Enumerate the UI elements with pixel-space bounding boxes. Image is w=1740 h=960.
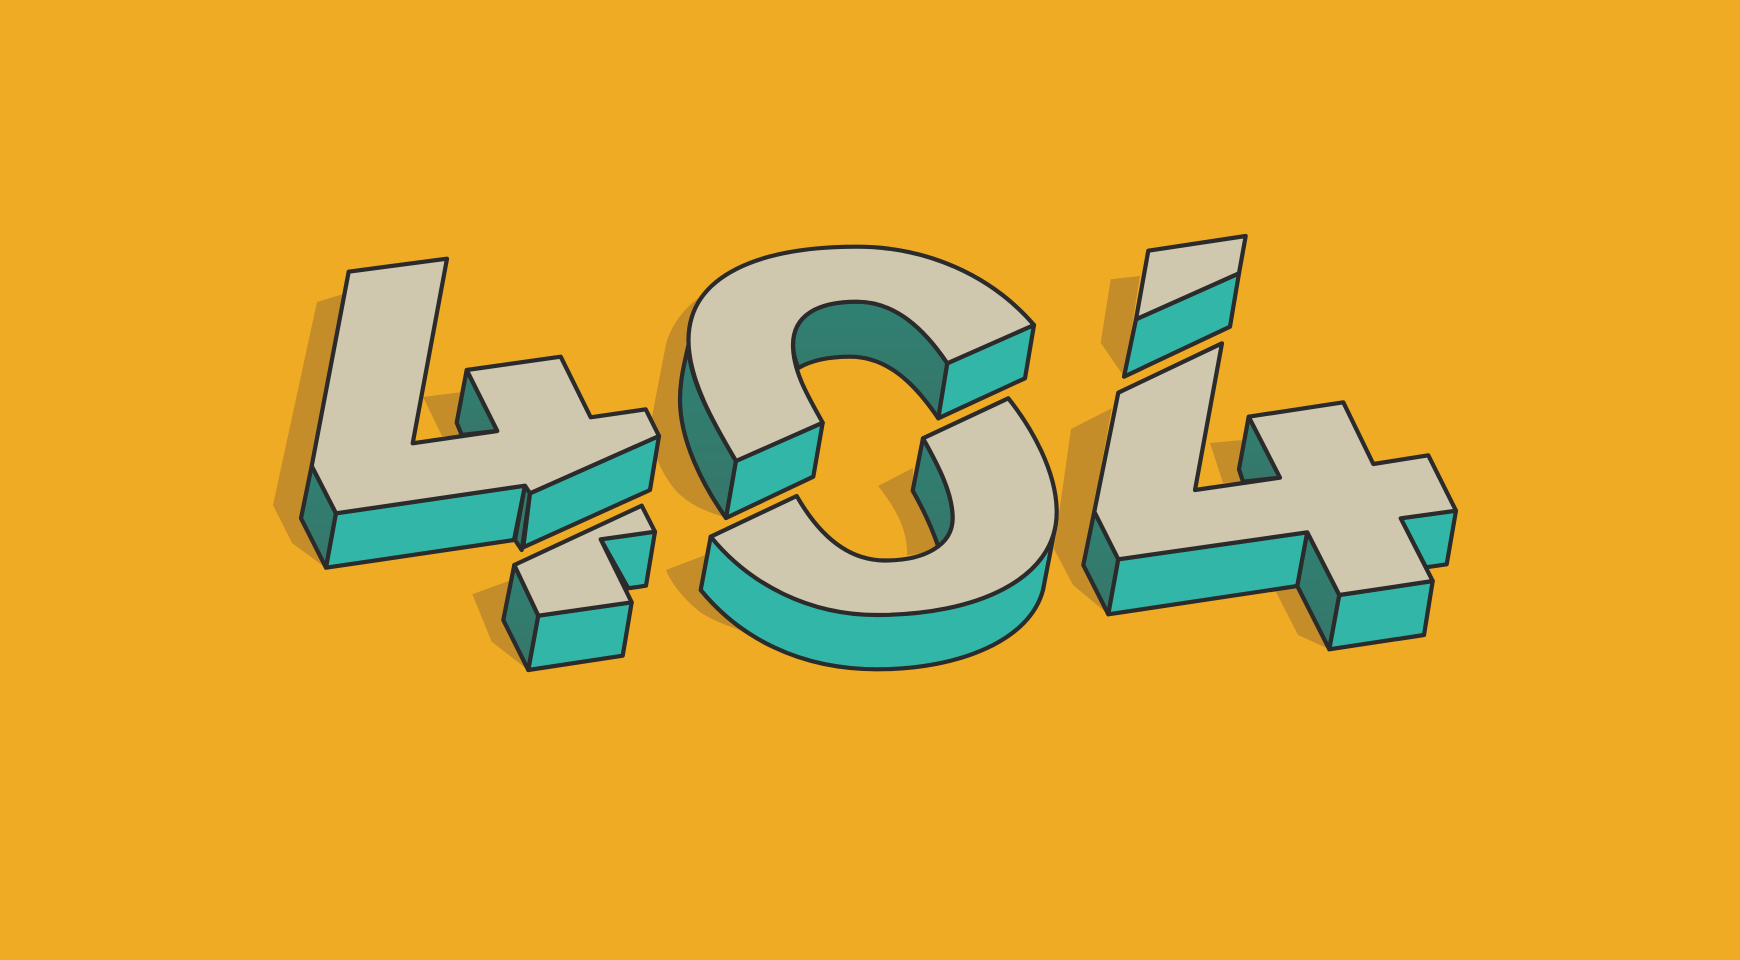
- first 4 upper piece: [301, 259, 659, 568]
- first digit 4: [301, 259, 659, 670]
- zero upper piece: [680, 247, 1034, 518]
- drop shadows under all digits: [273, 276, 1329, 670]
- middle digit 0: [680, 247, 1057, 669]
- last 4 top fragment: [1124, 236, 1246, 377]
- last digit 4: [1083, 236, 1456, 649]
- first 4 lower fragment: [503, 506, 655, 670]
- zero lower piece: [701, 398, 1057, 669]
- last 4 main piece: [1083, 343, 1456, 649]
